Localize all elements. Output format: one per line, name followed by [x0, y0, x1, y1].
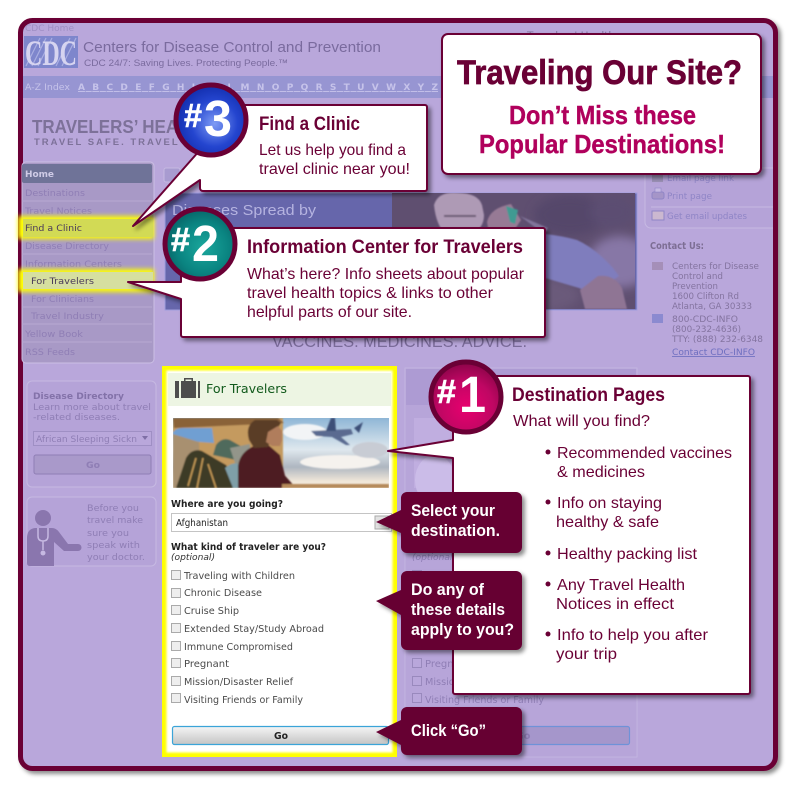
dark callout: click go [376, 707, 522, 755]
callout: Information Center for Travelers: Information Center for Travelers [247, 237, 523, 258]
sidebar navigation: Disease Directory [25, 242, 110, 252]
CDC logo: CDC [25, 33, 77, 73]
ghost panel behind destination callout: Visiting Friends or Family [425, 695, 544, 706]
destination question: Where are you going? [171, 499, 283, 510]
traveler type checklist: Cruise Ship [184, 606, 239, 617]
destination question: Afghanistan [176, 518, 228, 529]
badge: #3: # [184, 97, 202, 134]
sidebar navigation: Information Centers [25, 260, 122, 270]
title box: Don’t Miss these [509, 100, 696, 130]
social icon strip [164, 168, 180, 182]
site title: Travelers' Health: TRAVELERS’ HEALTH [32, 117, 210, 137]
site title: Travelers' Health: Travelers' Health [526, 31, 615, 41]
callout: Find a Clinic: Let us help you find a [259, 142, 406, 159]
site title: Travelers' Health: TRAVEL SAFE. TRAVEL SMART. [34, 137, 232, 148]
sidebar navigation: Yellow Book [24, 330, 84, 340]
contact us block [650, 241, 763, 358]
traveler type checklist: What kind of traveler are you? [171, 542, 326, 553]
banner: Diseases Spread by [165, 193, 637, 310]
title box: Popular Destinations! [479, 129, 725, 159]
dark callout: select your destination [376, 492, 522, 553]
right column tools [645, 168, 773, 228]
callout: Find a Clinic [133, 105, 427, 226]
contact us block: Control and [672, 272, 723, 282]
contact us block: (800-232-4636) [672, 325, 741, 335]
callout: Destination Pages: healthy & safe [556, 514, 659, 531]
traveler type checklist: Visiting Friends or Family [184, 695, 303, 706]
sidebar navigation: For Clinicians [31, 295, 94, 305]
icon: suitcase [175, 378, 200, 398]
dark callout: do any details apply [376, 571, 522, 650]
right column tools: Print page [667, 192, 712, 202]
A-Z index bar: A B C D E F G H I J K L M N O P Q R S T U V W X Y Z [78, 83, 438, 93]
sidebar navigation: Travel Notices [24, 207, 92, 217]
disease directory panel: -related diseases. [33, 413, 120, 423]
highlight: Find a Clinic [18, 216, 154, 239]
callout: Destination Pages: your trip [556, 646, 617, 663]
contact us block: 1600 Clifton Rd [672, 292, 739, 302]
highlight: For Travelers [18, 269, 154, 292]
site title: Travelers' Health [32, 31, 615, 148]
title box: Traveling Our Site? [457, 54, 742, 92]
callout: Destination Pages: Destination Pages [512, 385, 665, 406]
contact us block: Contact CDC-INFO [672, 348, 755, 358]
doctor advice panel [27, 497, 156, 566]
dark callout: do any details apply: these details [411, 601, 505, 619]
dark callout: do any details apply: Do any of [411, 581, 484, 599]
traveler type checklist: Immune Compromised [184, 642, 293, 653]
traveler type checklist: Chronic Disease [184, 588, 262, 599]
A-Z index bar: A-Z Index [25, 83, 70, 93]
sidebar navigation: Destinations [25, 189, 85, 199]
disease directory panel: African Sleeping Sickn [36, 435, 137, 445]
callout: Information Center for Travelers: travel health topics & links to other [247, 285, 494, 302]
callout: Destination Pages: & medicines [557, 464, 645, 481]
callout: Destination Pages: Healthy packing list [557, 546, 698, 563]
heading: vaccines medicines advice: VACCINES. MEDICINES. ADVICE. [272, 332, 527, 351]
ghost panel behind destination callout: (optional) [412, 553, 456, 563]
doctor advice panel: travel make [87, 516, 143, 526]
destination question [171, 499, 392, 532]
dark callout: select your destination: Select your [411, 502, 496, 520]
A-Z index bar [23, 76, 773, 98]
traveler type checklist: Pregnant [184, 659, 229, 670]
sidebar navigation: Home [25, 170, 54, 180]
contact us block: TTY: (888) 232-6348 [671, 335, 763, 345]
badge: #3 [176, 85, 246, 155]
icon: doctor [27, 510, 82, 566]
form header [168, 373, 391, 406]
callout: Destination Pages: Any Travel Health [557, 577, 685, 594]
doctor advice panel: sure you [87, 529, 129, 539]
dark callout: select your destination: destination. [411, 522, 500, 540]
ghost panel behind destination callout: Go [515, 731, 531, 742]
CDC site header: Centers for Disease Control and Prevention [83, 39, 381, 56]
traveler type checklist: Traveling with Children [183, 571, 295, 582]
ghost panel behind destination callout: Mission/Disaster Relief [425, 677, 535, 688]
right column tools: Email page link [667, 174, 734, 184]
callout: Destination Pages: Info to help you after [557, 627, 709, 644]
highlight: Find a Clinic: Find a Clinic [25, 224, 82, 234]
traveler type checklist: Extended Stay/Study Abroad [184, 624, 324, 635]
contact us block: 800-CDC-INFO [672, 315, 738, 325]
doctor advice panel: Before you [87, 504, 139, 514]
callout: Destination Pages: Info on staying [557, 495, 662, 512]
callout: Find a Clinic: travel clinic near you! [259, 161, 410, 178]
badge: #3: 3 [204, 90, 232, 147]
banner: Diseases Spread by: Diseases Spread by [172, 202, 317, 219]
callout: Destination Pages: Recommended vaccines [557, 445, 732, 462]
traveler type checklist [171, 542, 326, 706]
disease directory panel: Learn more about travel [33, 403, 151, 413]
CDC site header [24, 24, 381, 73]
callout: Information Center for Travelers [128, 228, 545, 337]
panel: For Travelers form [162, 366, 397, 757]
doctor advice panel: speak with [87, 541, 140, 551]
disease directory panel [27, 381, 156, 487]
callout: Destination Pages: Notices in effect [556, 596, 675, 613]
badge: #1: # [437, 373, 456, 410]
traveler type checklist: (optional) [171, 553, 215, 563]
badge: #2 [165, 209, 235, 279]
ghost panel behind destination callout: Pregnant [425, 659, 470, 670]
dark callout: do any details apply: apply to you? [411, 621, 514, 639]
callout: Destination Pages: What will you find? [513, 413, 650, 430]
Go button: Go [274, 731, 288, 742]
title box [442, 34, 761, 174]
callout: Find a Clinic: Find a Clinic [259, 114, 360, 135]
callout: Information Center for Travelers: helpful parts of our site. [247, 304, 412, 321]
sidebar navigation: RSS Feeds [25, 348, 75, 358]
sidebar navigation: Travel Industry [30, 312, 105, 322]
disease directory panel: Disease Directory [33, 392, 124, 402]
contact us block: Contact Us: [650, 241, 704, 252]
form header: For Travelers [206, 381, 287, 396]
right column tools: Get email updates [667, 212, 748, 222]
contact us block: Atlanta, GA 30333 [672, 302, 752, 312]
contact us block: Prevention [672, 282, 718, 292]
badge: #1 [431, 362, 501, 432]
dark callout: click go: Click “Go” [411, 722, 486, 740]
badge: #2: # [171, 221, 190, 258]
callout: Information Center for Travelers: What’s here? Info sheets about popular [247, 266, 525, 283]
CDC site header: CDC Home [25, 24, 74, 34]
disease directory panel: Go [86, 461, 100, 471]
banner photo: man applying repellent [392, 193, 635, 309]
contact us block: Centers for Disease [672, 262, 759, 272]
highlight: For Travelers: For Travelers [31, 277, 94, 287]
CDC logo [24, 33, 78, 73]
CDC site header: CDC 24/7: Saving Lives. Protecting People.™ [84, 58, 288, 69]
traveler type checklist: Mission/Disaster Relief [184, 677, 294, 688]
badge: #1: 1 [459, 366, 486, 423]
photo: traveler watching plane [173, 418, 389, 488]
Go button [172, 726, 388, 744]
ghost panel behind destination callout [405, 368, 637, 757]
badge: #2: 2 [192, 215, 219, 272]
callout: Destination Pages [388, 376, 750, 694]
sidebar navigation [22, 162, 154, 363]
doctor advice panel: your doctor. [87, 553, 145, 563]
